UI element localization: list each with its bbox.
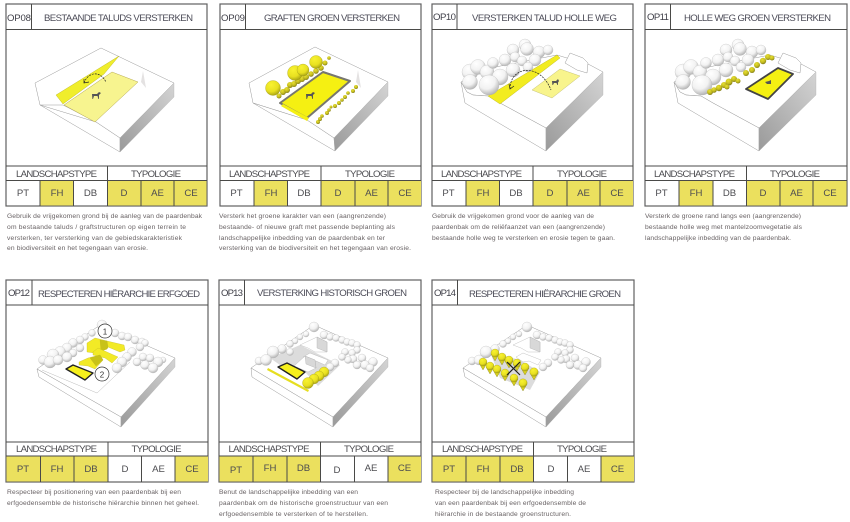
classification table: OP08: LANDSCHAPSTYPE: [16, 169, 97, 180]
icon: small building: [565, 53, 588, 73]
classification table: OP14: TYPOLOGIE: [557, 444, 607, 455]
classification table: OP09: D: [335, 188, 342, 199]
classification table: OP10: CE: [610, 188, 624, 199]
panel: OP08 bestaande taluds versterken: [6, 4, 207, 252]
classification table: OP09: [220, 166, 421, 206]
classification table: OP09: CE: [398, 188, 412, 199]
classification table: OP12: CE: [185, 464, 199, 475]
classification table: OP12: [6, 442, 208, 482]
description: OP13: erfgoedensemble te versterken of te herstellen.: [219, 511, 368, 518]
illustration: OP11 holle weg planting: [674, 39, 816, 151]
description: OP12: erfgoedensemble de historische hiërarchie binnen het geheel.: [7, 500, 199, 507]
classification table: OP11: D: [760, 188, 767, 199]
yellow trees grid: [479, 349, 538, 391]
description: OP11: bestaande holle weg met mantelzoomvegetatie als: [645, 224, 803, 231]
classification table: OP12: TYPOLOGIE: [132, 444, 182, 455]
classification table: OP14: AE: [578, 464, 590, 475]
header: OP12: RESPECTEREN HIËRARCHIE ERFGOED: [38, 289, 200, 300]
header: OP13: [219, 280, 421, 482]
classification table: OP12: PT: [17, 464, 29, 475]
description: OP14: van een paardenbak bij een erfgoedensemble de: [435, 500, 586, 507]
description: OP08: versterken, ter versterking van de gebiedskarakteristiek: [7, 235, 183, 242]
classification table: OP11: [645, 166, 847, 206]
classification table: OP14: [432, 442, 634, 482]
classification table: OP14: D: [548, 464, 555, 475]
classification table: OP13: PT: [230, 465, 242, 476]
classification table: OP13: AE: [365, 463, 377, 474]
classification table: OP11: AE: [790, 188, 803, 199]
header: OP09: [220, 4, 421, 206]
classification table: OP10: LANDSCHAPSTYPE: [441, 169, 522, 180]
classification table: OP14: CE: [611, 464, 624, 475]
header: OP09: OP09: [221, 13, 245, 24]
classification table: OP09: DB: [297, 188, 311, 199]
description: OP14: Respecteer bij de landschappelijke inbedding: [435, 489, 574, 496]
classification table: OP10: FH: [477, 188, 489, 199]
header: OP13: OP13: [221, 288, 243, 299]
header: OP10: VERSTERKEN TALUD HOLLE WEG: [472, 13, 617, 24]
illustration: OP09 graft with planting: [249, 47, 388, 151]
description: OP14: hiërarchie in de bestaande groenstructuren.: [435, 511, 571, 518]
classification table: OP09: PT: [230, 188, 243, 199]
description: OP13: [219, 489, 388, 518]
header: OP12: [6, 280, 208, 482]
description: OP11: [645, 213, 803, 242]
classification table: OP09: TYPOLOGIE: [345, 169, 395, 180]
classification table: OP13: DB: [297, 463, 310, 474]
header: OP14: [432, 280, 634, 482]
classification table: OP08: FH: [51, 188, 63, 199]
icon: horse: [765, 80, 771, 84]
classification table: OP09: LANDSCHAPSTYPE: [229, 169, 310, 180]
illustration: OP10 holle weg talud: [461, 39, 603, 151]
classification table: OP11: LANDSCHAPSTYPE: [654, 169, 735, 180]
header: OP09: GRAFTEN GROEN VERSTERKEN: [264, 13, 400, 24]
illustration: OP12 heritage ensemble: [37, 320, 175, 427]
classification table: OP13: [219, 442, 421, 482]
classification table: OP13: CE: [398, 463, 411, 474]
description: OP13: paardenbak om de historische groenstructuur van een: [219, 500, 388, 507]
classification table: OP10: [432, 166, 633, 206]
yellow riding arena: [66, 365, 93, 380]
description: OP12: Respecteer bij positionering van een paardenbak bij een: [7, 489, 181, 496]
description: OP11: landschappelijke inbedding van de paardenbak.: [645, 235, 791, 242]
classification table: OP13: LANDSCHAPSTYPE: [228, 444, 310, 455]
panel: OP12 respecteren hierarchie erfgoed: [6, 280, 208, 507]
classification table: OP08: DB: [84, 188, 97, 199]
classification table: OP12: D: [122, 464, 129, 475]
yellow riding arena: [278, 363, 305, 379]
description: OP10: [432, 213, 615, 242]
header: OP08: [6, 4, 207, 206]
description: OP13: Benut de landschappelijke inbedding van een: [219, 489, 358, 496]
icon: horse: [306, 92, 315, 99]
illustration: OP14 green hierarchy: [463, 322, 601, 427]
panel: OP10 versterken talud holle weg: [432, 4, 633, 242]
classification table: OP12: DB: [84, 464, 98, 475]
header: OP14: RESPECTEREN HIËRARCHIE GROEN: [469, 289, 621, 300]
description: OP09: landschappelijke inbedding van de paardenbak en ter: [219, 235, 386, 242]
crossed-out marker: [507, 362, 520, 375]
classification table: OP09: FH: [265, 188, 277, 199]
classification table: OP11: TYPOLOGIE: [770, 169, 820, 180]
classification table: OP11: DB: [723, 188, 736, 199]
description: OP09: Versterk het groene karakter van een (aangrenzende): [219, 213, 386, 220]
panel: OP14 respecteren hierarchie groen: [432, 280, 634, 518]
classification table: OP10: AE: [577, 188, 590, 199]
description: OP14: [435, 489, 586, 518]
classification table: OP08: [6, 166, 207, 206]
description: OP09: bestaande- of nieuwe graft met passende beplanting als: [219, 224, 396, 231]
header: OP11: HOLLE WEG GROEN VERSTERKEN: [684, 13, 831, 24]
description: OP08: [7, 213, 203, 252]
description: OP08: Gebruik de vrijgekomen grond bij de aanleg van de paardenbak: [7, 213, 203, 220]
header: OP08: OP08: [7, 13, 31, 24]
header: OP14: OP14: [434, 288, 457, 299]
classification table: OP08: AE: [151, 188, 164, 199]
yellow trees row: [302, 367, 329, 388]
description: OP08: om bestaande taluds / graftstructuren op eigen terrein te: [7, 224, 186, 231]
description: OP11: Versterk de groene rand langs een (aangrenzende): [645, 213, 801, 220]
classification table: OP08: PT: [17, 188, 29, 199]
classification table: OP10: D: [547, 188, 554, 199]
description: OP10: Gebruik de vrijgekomen grond voor de aanleg van de: [432, 213, 594, 220]
description: OP10: paardenbak om de reliëfaanzet van een (aangrenzende): [432, 224, 605, 231]
description: OP10: bestaande holle weg te versterken en erosie tegen te gaan.: [432, 235, 615, 242]
buildings highlighted yellow: [79, 338, 125, 369]
header: OP11: [645, 4, 847, 206]
header: OP13: VERSTERKING HISTORISCH GROEN: [257, 288, 407, 299]
classification table: OP12: AE: [152, 464, 165, 475]
header: OP11: OP11: [647, 12, 669, 23]
classification table: OP14: LANDSCHAPSTYPE: [442, 444, 523, 455]
classification table: OP13: TYPOLOGIE: [344, 444, 394, 455]
panel: OP13 versterking historisch groen: [219, 280, 421, 518]
classification table: OP08: TYPOLOGIE: [131, 169, 181, 180]
description: OP09: [219, 213, 411, 252]
classification table: OP09: AE: [365, 188, 378, 199]
header: OP08: BESTAANDE TALUDS VERSTERKEN: [44, 13, 193, 24]
classification table: OP11: CE: [823, 188, 837, 199]
classification table: OP10: TYPOLOGIE: [557, 169, 607, 180]
classification table: OP08: CE: [184, 188, 198, 199]
classification table: OP11: PT: [655, 188, 668, 199]
header: OP12: OP12: [8, 288, 30, 299]
classification table: OP12: LANDSCHAPSTYPE: [16, 444, 97, 455]
marker 1: 1: [103, 328, 108, 336]
marker 2: 2: [100, 370, 105, 380]
header: OP10: OP10: [433, 12, 456, 23]
classification table: OP10: PT: [442, 188, 455, 199]
panel: OP09 graften groen versterken: [219, 4, 421, 252]
header: OP10: [432, 4, 633, 206]
panel: OP11 holle weg groen versterken: [645, 4, 847, 242]
description: OP09: versterking van de biodiversiteit en het tegengaan van erosie.: [219, 245, 411, 252]
illustration: OP13 historic green: [251, 322, 388, 427]
classification table: OP11: FH: [690, 188, 702, 199]
classification table: OP13: FH: [264, 463, 276, 474]
classification table: OP08: D: [121, 188, 128, 199]
classification table: OP13: D: [334, 465, 341, 476]
description: OP08: en biodiversiteit en het tegengaan van erosie.: [7, 245, 148, 252]
classification table: OP14: PT: [443, 464, 455, 475]
icon: horse: [92, 92, 101, 99]
icon: horse: [552, 79, 559, 85]
classification table: OP14: FH: [477, 464, 489, 475]
classification table: OP14: DB: [510, 464, 524, 475]
description: OP12: [7, 489, 199, 507]
classification table: OP10: DB: [509, 188, 523, 199]
illustration: OP08 talud block: [35, 48, 174, 152]
icon: small building: [778, 53, 801, 73]
classification table: OP12: FH: [51, 464, 63, 475]
